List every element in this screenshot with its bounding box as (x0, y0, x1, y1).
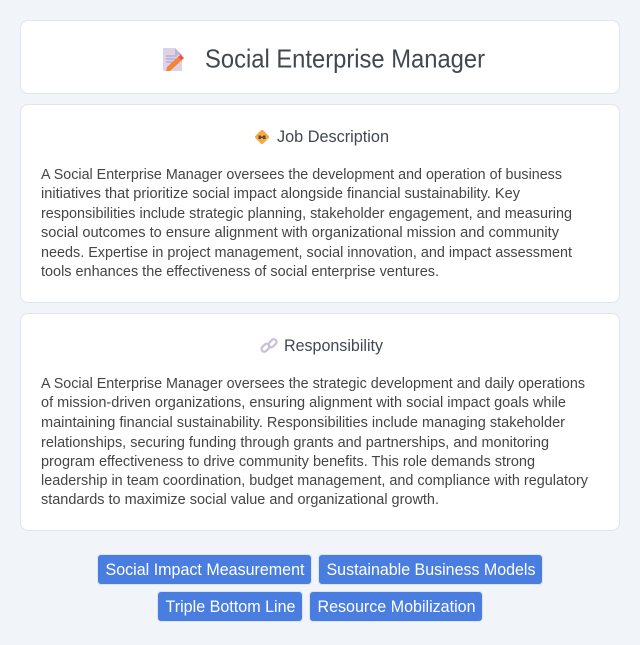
icon: orange diamond (255, 130, 269, 144)
text block: job description paragraph: tools enhances the effectiveness of social enterprise ventures. (41, 264, 439, 280)
heading: Responsibility: Responsibility (284, 337, 384, 355)
text block: responsibility paragraph (41, 376, 589, 508)
tag: Sustainable Business Models (318, 554, 543, 585)
tag: Triple Bottom Line (157, 591, 303, 622)
panel: responsibility (20, 313, 620, 531)
icon: chain link (260, 338, 278, 353)
text block: job description paragraph: initiatives that prioritize social impact alongside financial sustainability. Key (41, 186, 521, 202)
heading: Social Enterprise Manager: Social Enterprise Manager (205, 46, 485, 74)
text block: job description paragraph: A Social Enterprise Manager oversees the development and operation of business (41, 167, 562, 183)
text block: job description paragraph: needs. Expertise in project management, social innovation, and impact assessment (41, 245, 572, 261)
tag: Social Impact Measurement: Social Impact Measurement (106, 561, 305, 579)
text block: responsibility paragraph: relationships, securing funding through grants and partnerships, and monitoring (41, 435, 549, 451)
tag: Resource Mobilization: Resource Mobilization (318, 598, 476, 616)
text block: job description paragraph: social outcomes to ensure alignment with organizational mission and community (41, 225, 560, 241)
text block: responsibility paragraph: of mission-driven organizations, ensuring alignment with social impact goals while (41, 395, 566, 411)
tag: Sustainable Business Models: Sustainable Business Models (326, 561, 536, 579)
text block: responsibility paragraph: standards to maximize social value and organizational growth. (41, 492, 439, 508)
text block: responsibility paragraph: program effectiveness to drive community benefits. This role demands strong (41, 454, 535, 470)
text block: responsibility paragraph: maintaining financial sustainability. Responsibilities include managing stakeholder (41, 415, 565, 431)
text block: job description paragraph: responsibilities include strategic planning, stakeholder engagement, and measuring (41, 206, 572, 222)
tag: Triple Bottom Line: Triple Bottom Line (166, 598, 296, 616)
text block: responsibility paragraph: leadership in team coordination, budget management, and compliance with regulatory (41, 473, 589, 489)
text block: responsibility paragraph: A Social Enterprise Manager oversees the strategic development and daily operations (41, 376, 585, 392)
panel: job description (20, 104, 620, 303)
tag: Resource Mobilization (309, 591, 483, 622)
panel: title (20, 20, 620, 94)
tag: Social Impact Measurement (97, 554, 312, 585)
text block: job description paragraph (41, 167, 572, 280)
icon: document with pencil (163, 48, 184, 71)
heading: Job Description: Job Description (277, 128, 389, 146)
